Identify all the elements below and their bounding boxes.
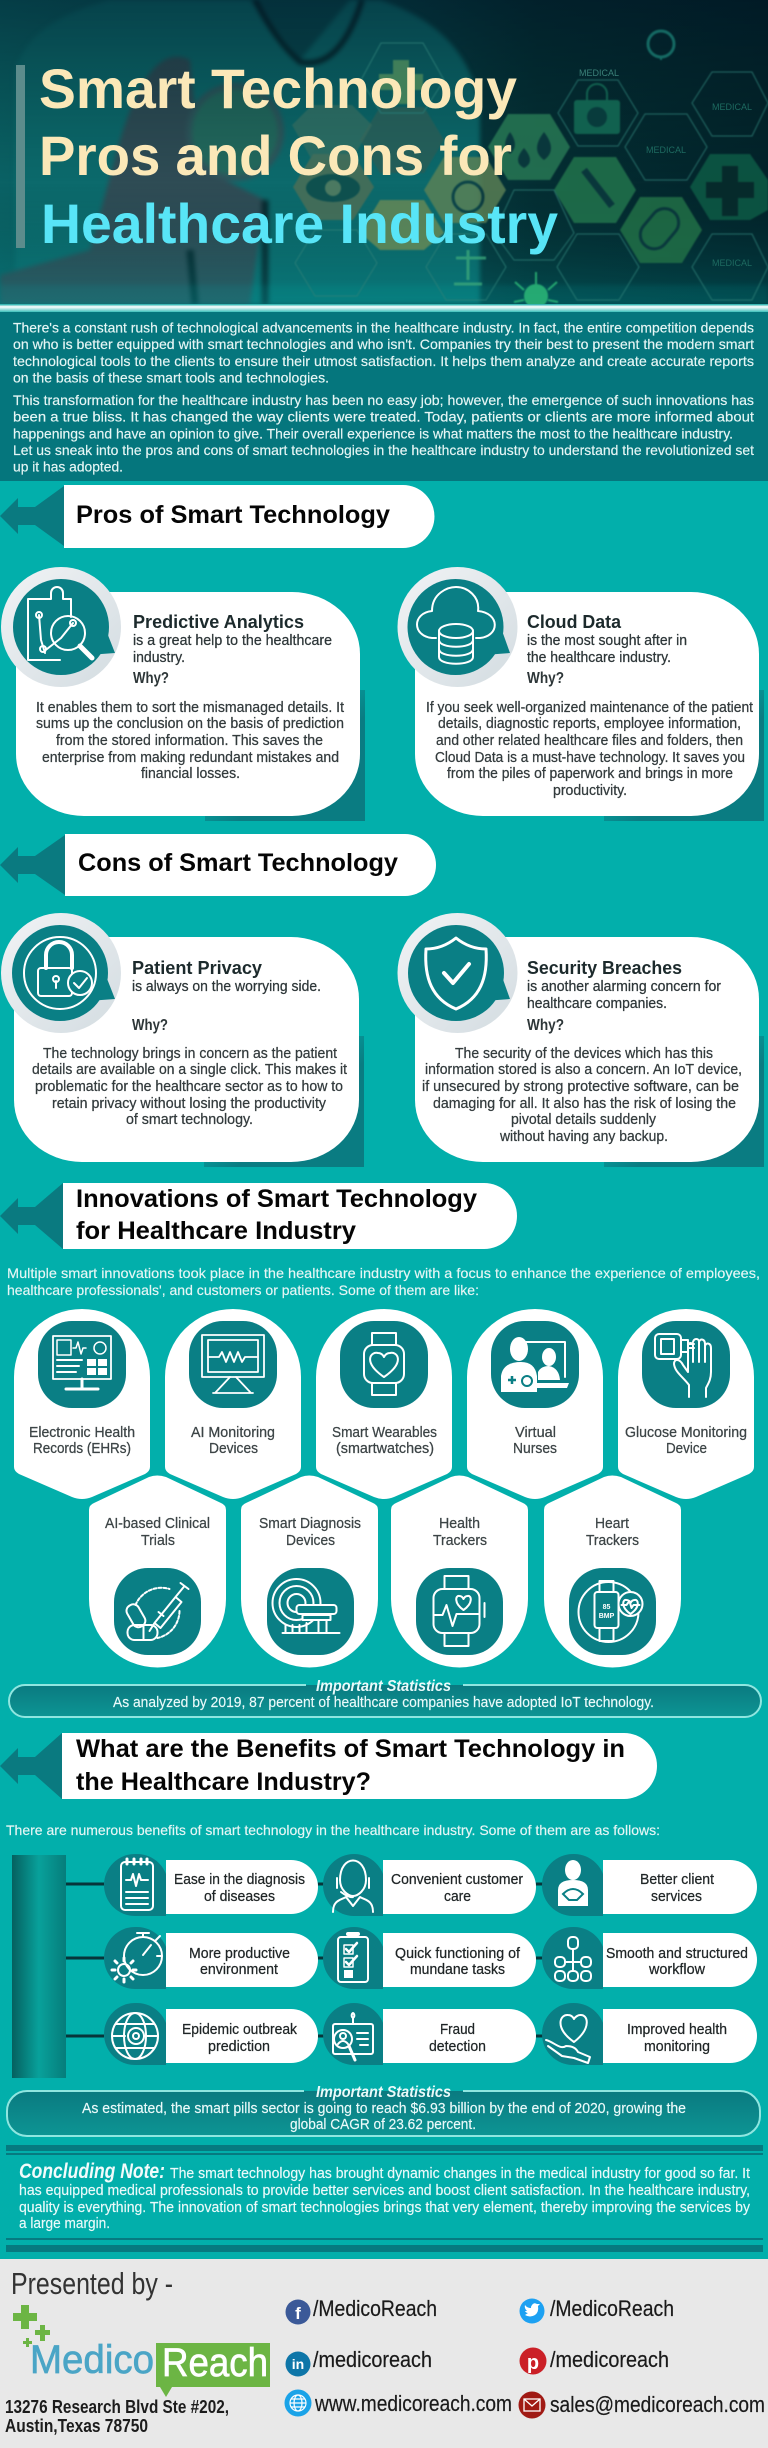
icon: clipboard analytics: [28, 587, 92, 660]
body text: If you seek well-organized maintenance of the patient: [426, 700, 753, 716]
card: glucose monitoring device: Device: [666, 1441, 707, 1457]
benefit: fraud detection: [323, 2003, 536, 2065]
callout: important statistics 1: As analyzed by 2019, 87 percent of healthcare companies have adopted IoT technology.: [113, 1695, 654, 1711]
card: heart trackers: [544, 1476, 681, 1668]
body text: Cloud Data is a must-have technology. It saves you: [435, 750, 745, 766]
address: [5, 2397, 229, 2436]
panel: cloud data: [398, 567, 764, 821]
callout: important statistics 2: Important Statistics: [316, 2084, 451, 2101]
body text: from the stored information. This saves the: [56, 733, 323, 749]
body text: retain privacy without losing the productivity: [52, 1096, 327, 1112]
panel: predictive analytics: is a great help to the healthcare: [133, 633, 332, 649]
innovations intro text: Multiple smart innovations took place in the healthcare industry with a focus to enhance the experience of employees,: [7, 1265, 760, 1281]
logo: MedicoReach: Medico: [30, 2338, 154, 2382]
body text: [36, 700, 344, 782]
benefit: convenient customer care: care: [444, 1888, 471, 1905]
heading: benefits: What are the Benefits of Smart Technology in: [76, 1735, 625, 1763]
logo: MedicoReach: [13, 2305, 270, 2397]
benefit: convenient customer care: Convenient customer: [391, 1871, 523, 1888]
arrow: [0, 835, 65, 895]
intro paragraph 1: [13, 320, 754, 386]
benefit: ease in diagnosis: of diseases: [204, 1888, 275, 1905]
benefit: improved health monitoring: [542, 2003, 757, 2065]
body text: if unsecured by strong protective software, can be: [422, 1079, 739, 1095]
body text: productivity.: [553, 783, 627, 799]
heading: pros of smart technology: [0, 485, 434, 548]
presented by: Presented by -: [11, 2266, 173, 2301]
icon: virtual nurse: [501, 1337, 569, 1392]
card: smart wearables: Smart Wearables: [332, 1425, 437, 1441]
body text: sums up the conclusion on the basis of prediction: [36, 716, 344, 732]
hero banner: MEDICAL: [646, 145, 686, 155]
icon: syringe and capsule: [124, 1583, 188, 1640]
hero banner: MEDICAL: [579, 68, 619, 78]
benefit: fraud detection: Fraud: [440, 2021, 475, 2038]
body text: The technology brings in concern as the patient: [43, 1046, 337, 1062]
icon: shield with check: [426, 938, 486, 1009]
icon: heart rate tracker: [578, 1581, 642, 1642]
card: heart trackers: Trackers: [586, 1533, 639, 1549]
intro paragraph 2: happenings and have an opinion to give. Their overall experience is what matters the most to the healthcare industry.: [13, 426, 733, 442]
intro paragraph 2: Let us sneak into the pros and cons of smart technologies in the healthcare industry to understand the revolutionized set: [13, 442, 754, 458]
benefit: improved health monitoring: Improved health: [627, 2021, 727, 2038]
callout: important statistics 2: [7, 2084, 760, 2136]
icon: checklist clipboard: [338, 1934, 368, 1982]
body text: damaging for all. It also has the risk of losing the: [433, 1096, 736, 1112]
benefit: better client services: services: [651, 1888, 702, 1905]
body text: The security of the devices which has this: [455, 1046, 713, 1062]
concluding note: Concluding Note:: [19, 2160, 165, 2183]
card: virtual nurses: [467, 1309, 603, 1499]
panel: cloud data: Why?: [527, 670, 564, 687]
body text: of smart technology.: [126, 1112, 253, 1128]
panel: predictive analytics: Why?: [133, 670, 169, 687]
benefit: smooth workflow: workflow: [648, 1961, 705, 1978]
panel: patient privacy: Patient Privacy: [132, 958, 262, 978]
intro paragraph 1: on who is better equipped with smart technologies and who isn't. Companies try their best to present the modern smart: [13, 336, 754, 352]
card: virtual nurses: Nurses: [513, 1441, 557, 1457]
callout: important statistics 2: global CAGR of 23.62 percent.: [290, 2117, 476, 2133]
card: virtual nurses: Virtual: [515, 1425, 556, 1441]
panel: security breaches: [398, 913, 764, 1167]
card: health trackers: [391, 1476, 528, 1668]
card: health trackers: Trackers: [433, 1533, 487, 1549]
card: smart diagnosis devices: [241, 1476, 378, 1668]
card: health trackers: Health: [439, 1516, 480, 1532]
intro paragraph 2: up it has adopted.: [13, 458, 123, 474]
icon: health tracker watch: [434, 1576, 484, 1646]
innovations intro text: healthcare professionals', and customers or patients. Some of them are like:: [7, 1282, 479, 1298]
heading: benefits: the Healthcare Industry?: [76, 1768, 371, 1796]
icon: stopwatch and gear: [112, 1933, 162, 1982]
callout: important statistics 1: Important Statistics: [316, 1678, 451, 1695]
card: AI monitoring devices: AI Monitoring: [191, 1425, 275, 1441]
title: [39, 57, 558, 255]
pinterest: [520, 2347, 669, 2374]
body text: [32, 1046, 347, 1128]
intro paragraph 2: been a true bliss. It has changed the way clients were treated. Today, patients or clients are more informed about: [13, 408, 754, 424]
hero banner: MEDICAL: [712, 258, 752, 268]
benefit: quick functioning of mundane tasks: mundane tasks: [410, 1961, 505, 1978]
arrow: [0, 1733, 62, 1799]
card: AI-based clinical trials: AI-based Clinical: [105, 1516, 210, 1532]
benefit: epidemic outbreak prediction: Epidemic outbreak: [182, 2021, 297, 2038]
intro paragraph 2: This transformation for the healthcare industry has been no easy job; however, the emergence of such innovations has: [13, 392, 754, 408]
body text: It enables them to sort the mismanaged details. It: [36, 700, 344, 716]
website: www.medicoreach.com: [314, 2391, 512, 2416]
linkedin: [286, 2347, 432, 2376]
benefit: more productive environment: [104, 1927, 318, 1989]
panel: security breaches: Why?: [527, 1017, 564, 1034]
heading: innovations: [0, 1183, 517, 1249]
card: smart diagnosis devices: Smart Diagnosis: [259, 1516, 361, 1532]
title accent bar: [16, 65, 25, 248]
body text: information stored is also a concern. An IoT device,: [425, 1062, 742, 1078]
twitter: [520, 2296, 674, 2324]
doctor illustration: [0, 0, 768, 304]
heading: benefits: [0, 1733, 657, 1799]
body text: details are available on a single click. This makes it: [32, 1062, 347, 1078]
benefit: fraud detection: detection: [429, 2038, 486, 2055]
body text: and other related healthcare files and folders, then: [436, 733, 743, 749]
innovations intro text: [7, 1265, 760, 1298]
panel: predictive analytics: industry.: [133, 650, 185, 666]
panel: predictive analytics: [1, 567, 365, 821]
panel: patient privacy: Why?: [132, 1017, 168, 1034]
benefit: smooth workflow: Smooth and structured: [606, 1945, 748, 1962]
icon: glucose meter and hand: [655, 1334, 711, 1397]
benefit: quick functioning of mundane tasks: [323, 1927, 536, 1989]
panel: security breaches: healthcare companies.: [527, 996, 667, 1012]
panel: security breaches: is another alarming concern for: [527, 979, 721, 995]
card: smart diagnosis devices: Devices: [286, 1533, 335, 1549]
twitter: /MedicoReach: [550, 2296, 674, 2321]
hero banner: [0, 0, 768, 308]
panel: cloud data: the healthcare industry.: [527, 650, 671, 666]
panel: security breaches: Security Breaches: [527, 958, 682, 978]
body text: problematic for the healthcare sector as to how to: [35, 1079, 343, 1095]
benefit: convenient customer care: [323, 1854, 536, 1916]
benefit: ease in diagnosis: Ease in the diagnosis: [174, 1871, 305, 1888]
concluding note: a large margin.: [19, 2216, 110, 2232]
title: Smart Technology: [39, 57, 517, 120]
intro paragraph 1: There's a constant rush of technological advancements in the healthcare industry. In fact, the entire competition depends: [13, 320, 754, 336]
pinterest: p: [527, 2352, 539, 2374]
concluding note: has equipped medical professionals to provide better services and boost client satisfaction. In the healthcare industry,: [19, 2183, 750, 2199]
divider stripe: [0, 304, 768, 312]
title: Healthcare Industry: [41, 192, 558, 255]
icon: smartwatch with heart: [364, 1333, 404, 1395]
concluding note: quality is everything. The innovation of smart technologies brings that very element, thereby improving the services by: [19, 2200, 751, 2216]
linkedin: /medicoreach: [313, 2347, 432, 2372]
card: glucose monitoring device: Glucose Monitoring: [625, 1425, 747, 1441]
heading: innovations: for Healthcare Industry: [76, 1217, 356, 1245]
card: smart wearables: [316, 1309, 452, 1499]
callout: important statistics 1: [9, 1678, 761, 1717]
concluding note: The smart technology has brought dynamic changes in the medical industry for good so far. It: [170, 2166, 750, 2182]
body text: [422, 1046, 742, 1145]
icon: customer support agent: [333, 1860, 373, 1912]
benefits trunk bar: [12, 1855, 543, 2078]
card: heart trackers: Heart: [595, 1516, 629, 1532]
benefit: epidemic outbreak prediction: prediction: [208, 2038, 270, 2055]
benefit: quick functioning of mundane tasks: Quick functioning of: [395, 1945, 521, 1962]
panel: cloud data: Cloud Data: [527, 612, 622, 632]
panel: patient privacy: is always on the worrying side.: [132, 979, 321, 995]
icon: AI monitor: [202, 1335, 264, 1393]
benefit: better client services: Better client: [640, 1871, 715, 1888]
panel: patient privacy: [1, 913, 364, 1167]
panel: predictive analytics: Predictive Analytics: [133, 612, 304, 632]
body text: from the piles of paperwork and brings in more: [447, 766, 733, 782]
hero banner: MEDICAL: [712, 102, 752, 112]
icon: ID card and magnifier: [333, 2013, 373, 2060]
heading: innovations: Innovations of Smart Technology: [76, 1185, 477, 1213]
card: AI monitoring devices: Devices: [209, 1441, 258, 1457]
benefits intro text: There are numerous benefits of smart technology in the healthcare industry. Some of them are as follows:: [6, 1822, 660, 1838]
icon: cloud database: [417, 587, 495, 664]
facebook: /MedicoReach: [313, 2296, 437, 2321]
icon: heart rate tracker: 85: [603, 1604, 610, 1611]
icon: client with badge: [558, 1860, 588, 1906]
card: electronic health records: [14, 1309, 150, 1499]
linkedin: in: [292, 2356, 304, 2372]
address: Austin,Texas 78750: [5, 2416, 148, 2436]
title: Pros and Cons for: [39, 124, 512, 187]
body text: enterprise from making redundant mistakes and: [42, 750, 339, 766]
arrow: [0, 1183, 63, 1249]
benefit: smooth workflow: [542, 1927, 757, 1989]
card: smart wearables: (smartwatches): [336, 1441, 434, 1457]
address: 13276 Research Blvd Ste #202,: [5, 2397, 229, 2417]
icon: padlock with check: [24, 937, 96, 1009]
card: AI monitoring devices: [165, 1309, 301, 1499]
body text: without having any backup.: [499, 1129, 668, 1145]
card: AI-based clinical trials: Trials: [141, 1533, 175, 1549]
intro paragraph 1: technological tools to the clients to ensure their utmost satisfaction. It helps them analyze and create accurate reports: [13, 353, 754, 369]
arrow: [0, 486, 64, 546]
benefit: more productive environment: More productive: [189, 1945, 290, 1962]
intro panel: [0, 312, 768, 481]
intro paragraph 1: on the basis of these smart tools and technologies.: [13, 370, 329, 386]
benefit: ease in diagnosis: [104, 1854, 318, 1916]
benefit: more productive environment: environment: [200, 1961, 279, 1978]
logo: MedicoReach: Reach: [162, 2341, 268, 2385]
facebook: [286, 2296, 437, 2324]
card: electronic health records: Electronic Health: [29, 1425, 135, 1441]
heading: cons of smart technology: Cons of Smart Technology: [78, 849, 398, 877]
body text: details, diagnostic reports, employee information,: [438, 716, 741, 732]
icon: workflow nodes: [555, 1937, 591, 1981]
heading: pros of smart technology: Pros of Smart Technology: [76, 501, 390, 529]
callout: important statistics 2: As estimated, the smart pills sector is going to reach $6.93 billion by the end of 2020, growing the: [82, 2101, 686, 2117]
card: AI-based clinical trials: [89, 1476, 226, 1668]
benefit: improved health monitoring: monitoring: [644, 2038, 710, 2055]
intro paragraph 2: [13, 392, 754, 474]
body text: pivotal details suddenly: [511, 1112, 657, 1128]
panel: cloud data: is the most sought after in: [527, 633, 687, 649]
footer: [0, 2259, 768, 2448]
facebook: f: [295, 2304, 301, 2323]
body text: financial losses.: [141, 766, 240, 782]
pinterest: /medicoreach: [550, 2347, 669, 2372]
medical hexagons: [292, 31, 768, 308]
icon: MRI scanner: [272, 1579, 340, 1633]
icon: heart on hand: [546, 2015, 590, 2063]
icon: EHR monitor: [53, 1336, 111, 1389]
benefit: epidemic outbreak prediction: [104, 2003, 318, 2065]
card: electronic health records: Records (EHRs): [33, 1441, 131, 1457]
icon: heart rate tracker: BMP: [599, 1613, 615, 1620]
icon: clinical notes: [121, 1859, 153, 1910]
card: glucose monitoring device: [618, 1309, 754, 1499]
concluding note: [6, 2145, 763, 2252]
icon: globe with virus: [112, 2013, 158, 2059]
heading: cons of smart technology: [0, 834, 436, 896]
body text: [426, 700, 753, 799]
benefit: better client services: [542, 1854, 757, 1916]
